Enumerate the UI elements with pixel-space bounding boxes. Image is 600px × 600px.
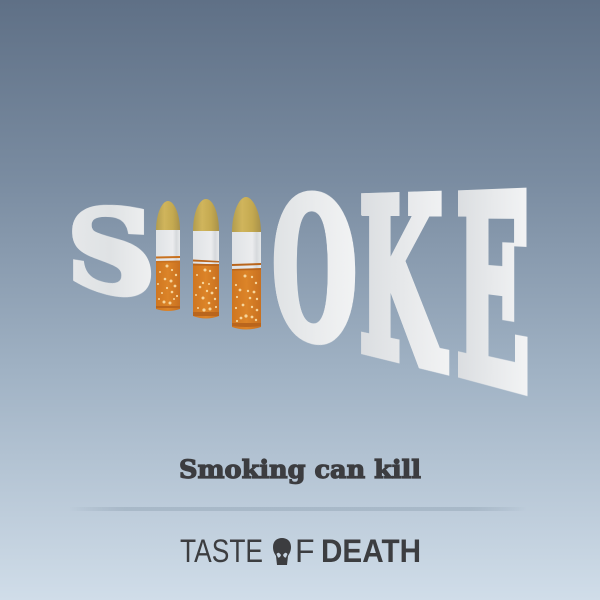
icon: skull xyxy=(273,538,291,565)
tagline: TASTE: TASTE xyxy=(180,533,263,569)
letter S: S xyxy=(69,136,119,309)
letter K: K xyxy=(360,129,389,399)
bullet cigarette 2 xyxy=(193,199,219,318)
bullet tip 1 xyxy=(156,201,180,230)
tagline: F: F xyxy=(295,533,315,569)
filter 2 xyxy=(193,260,219,318)
bullet cigarette 1 xyxy=(156,201,180,311)
paper 2 xyxy=(193,231,219,266)
bullet tip 3 xyxy=(232,197,261,232)
tagline: DEATH: DEATH xyxy=(321,533,421,569)
paper 3 xyxy=(232,232,261,272)
bullet cigarette 3 xyxy=(232,197,261,330)
filter 3 xyxy=(232,263,261,330)
paper 1 xyxy=(156,230,180,264)
letter O: O xyxy=(273,138,313,372)
filter 1 xyxy=(156,256,180,311)
heading: Smoking can kill: Smoking can kill xyxy=(179,455,421,484)
divider xyxy=(70,507,526,511)
bullet tip 2 xyxy=(193,199,219,231)
letter E: E xyxy=(457,124,473,429)
